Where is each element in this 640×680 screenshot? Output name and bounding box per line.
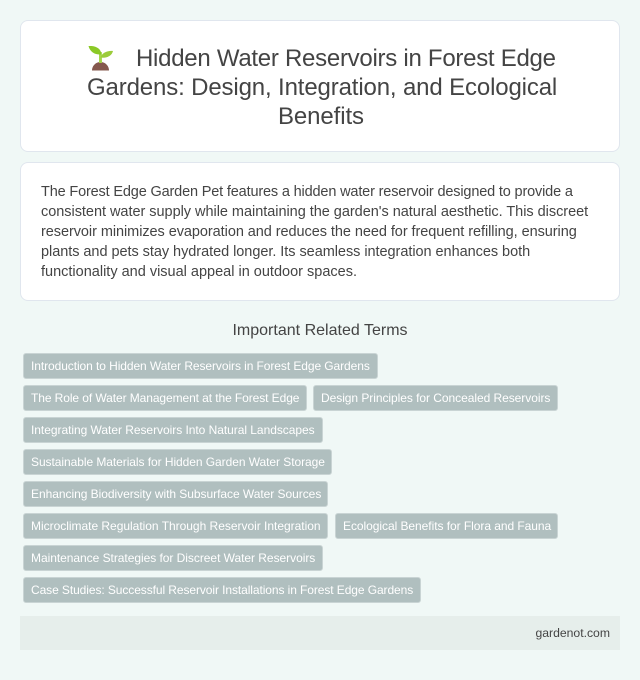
description text: The Forest Edge Garden Pet features a hidden water reservoir designed to provide a xyxy=(41,184,573,200)
description card xyxy=(20,162,620,301)
tags list: Integrating Water Reservoirs Into Natural Landscapes xyxy=(31,423,315,437)
icon: seedling xyxy=(88,46,113,70)
tags list: Introduction to Hidden Water Reservoirs in Forest Edge Gardens xyxy=(31,359,370,373)
title text xyxy=(87,45,557,130)
tags list: Case Studies: Successful Reservoir Installations in Forest Edge Gardens xyxy=(31,583,413,597)
description text: functionality and visual appeal in outdoor spaces. xyxy=(41,264,357,280)
tags list: Maintenance Strategies for Discreet Water Reservoirs xyxy=(31,551,315,565)
description text: plants and pets stay hydrated longer. Its seamless integration enhances both xyxy=(41,244,530,260)
description text: consistent water supply while maintaining the garden's natural aesthetic. This discreet xyxy=(41,204,588,220)
tags list: Enhancing Biodiversity with Subsurface Water Sources xyxy=(31,487,321,501)
tags list: Design Principles for Concealed Reservoirs xyxy=(321,391,550,405)
tags list: Sustainable Materials for Hidden Garden Water Storage xyxy=(31,455,325,469)
title text: Benefits xyxy=(278,103,364,130)
tags list: Ecological Benefits for Flora and Fauna xyxy=(343,519,551,533)
description text xyxy=(41,184,588,280)
tags list: The Role of Water Management at the Forest Edge xyxy=(31,391,299,405)
description text: reservoir minimizes evaporation and reduces the need for frequent refilling, ensuring xyxy=(41,224,577,240)
title card xyxy=(20,20,620,152)
title text: Gardens: Design, Integration, and Ecological xyxy=(87,74,557,101)
tags list xyxy=(23,353,558,603)
section heading: Important Related Terms xyxy=(232,322,408,339)
footer text: gardenot.com xyxy=(535,626,610,640)
tags list: Microclimate Regulation Through Reservoir Integration xyxy=(31,519,321,533)
title text: Hidden Water Reservoirs in Forest Edge xyxy=(136,45,556,72)
footer bar xyxy=(20,616,620,650)
